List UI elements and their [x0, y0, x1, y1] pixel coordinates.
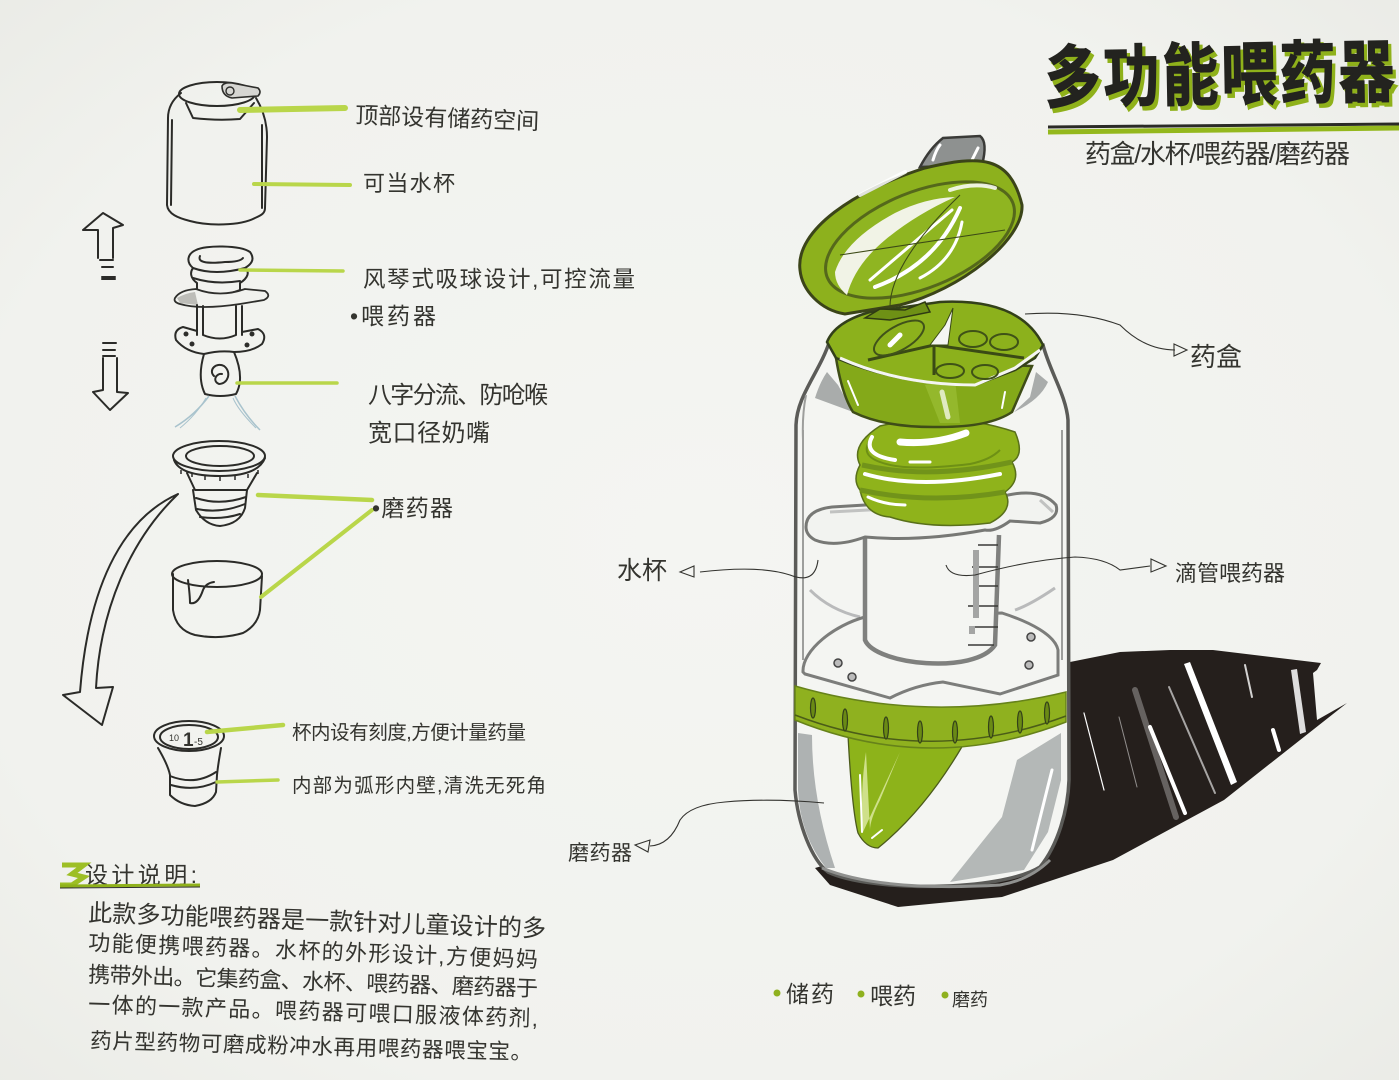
bottle body — [795, 340, 1069, 886]
legend: grinding: 磨药 — [952, 990, 988, 1010]
up arrow — [83, 213, 123, 279]
hinge — [865, 302, 930, 320]
can sketch: cup body — [167, 82, 267, 224]
base rim — [822, 860, 1050, 887]
label: nipple lines: 宽口径奶嘴 — [368, 420, 490, 447]
design notes paragraph: 功能便携喂药器。水杯的外形设计,方便妈妈 — [88, 930, 538, 972]
arrowhead: medicine box — [1174, 344, 1187, 356]
shadow — [815, 650, 1347, 907]
curved arrow — [63, 494, 178, 725]
arrowhead: dropper — [1151, 559, 1166, 572]
label: grinder main: 磨药器 — [568, 842, 632, 865]
medicine box top — [827, 302, 1043, 385]
label: top storage: 顶部设有储药空间 — [355, 102, 540, 134]
title: 多功能喂药器 — [1047, 39, 1398, 121]
band ribs — [810, 698, 1050, 743]
leader: water cup — [700, 560, 818, 578]
band — [795, 686, 1066, 748]
legend: storage: 储药 — [786, 981, 834, 1007]
label: dropper: 滴管喂药器 — [1175, 561, 1285, 586]
liquid reflections — [810, 588, 1055, 617]
leader: grinder main — [650, 800, 824, 846]
plate — [803, 613, 1058, 698]
green cone — [848, 735, 963, 848]
design notes paragraph: 此款多功能喂药器是一款针对儿童设计的多 — [88, 900, 546, 943]
inner body lines — [803, 395, 1062, 660]
heading: design notes: 设计说明: — [85, 862, 197, 888]
dropper tube — [865, 535, 999, 664]
green leader: top storage — [240, 108, 345, 110]
cup sketch — [172, 561, 262, 637]
flange — [806, 493, 1057, 543]
label: bellows: 风琴式吸球设计,可控流量 — [363, 267, 635, 292]
scale cup sketch: 1 — [183, 730, 194, 751]
label: grinder: •磨药器 — [372, 495, 453, 521]
title underline — [1048, 124, 1399, 132]
label: water cup main: 水杯 — [617, 557, 667, 585]
design notes paragraph: 药片型药物可磨成粉冲水再用喂药器喂宝宝。 — [90, 1029, 532, 1065]
arrowhead: water cup — [680, 566, 694, 577]
scale cup sketch: -5 — [194, 737, 203, 748]
design notes paragraph — [88, 900, 546, 1065]
grey shoulder arc — [815, 372, 1048, 412]
green leaders: grinder — [258, 495, 372, 597]
bottle — [795, 136, 1069, 887]
scale cup sketch: 10 — [169, 733, 179, 743]
arrowhead: grinder main — [635, 840, 650, 852]
label: feeder: •喂药器 — [350, 303, 436, 329]
label: nipple lines: 八字分流、防呛喉 — [368, 382, 548, 409]
medicine box bowl — [836, 358, 1032, 427]
label: scale: 杯内设有刻度,方便计量药量 — [292, 722, 526, 744]
green leader: nipple — [237, 381, 337, 385]
green leader: inner wall — [217, 780, 278, 782]
scale cup sketch — [154, 721, 224, 806]
green leader: water cup — [254, 184, 350, 185]
grinder sketch — [173, 441, 265, 526]
tab — [920, 136, 985, 167]
lower grey reflections — [798, 733, 835, 868]
lid inner — [809, 158, 1031, 322]
title: 多功能喂药器 — [1044, 35, 1395, 117]
green leader: bellows — [240, 270, 343, 271]
leader: medicine box — [1025, 313, 1175, 350]
label: nipple lines — [368, 382, 548, 447]
label: medicine box: 药盒 — [1190, 342, 1242, 372]
down arrow — [93, 343, 128, 410]
label: inner wall: 内部为弧形内壁,清洗无死角 — [292, 775, 546, 797]
green leader: scale — [207, 725, 283, 732]
label: water cup: 可当水杯 — [363, 171, 455, 196]
leader: dropper — [946, 557, 1150, 576]
design notes paragraph: 携带外出。它集药盒、水杯、喂药器、磨药器于 — [88, 962, 538, 1001]
lid — [800, 161, 1022, 314]
bellows — [856, 419, 1019, 525]
design notes paragraph: 一体的一款产品。喂药器可喂口服液体药剂, — [88, 992, 538, 1031]
subtitle: 药盒/水杯/喂药器/磨药器 — [1085, 139, 1350, 169]
legend: feeding: 喂药 — [870, 983, 916, 1009]
feeder sketch — [175, 246, 268, 430]
